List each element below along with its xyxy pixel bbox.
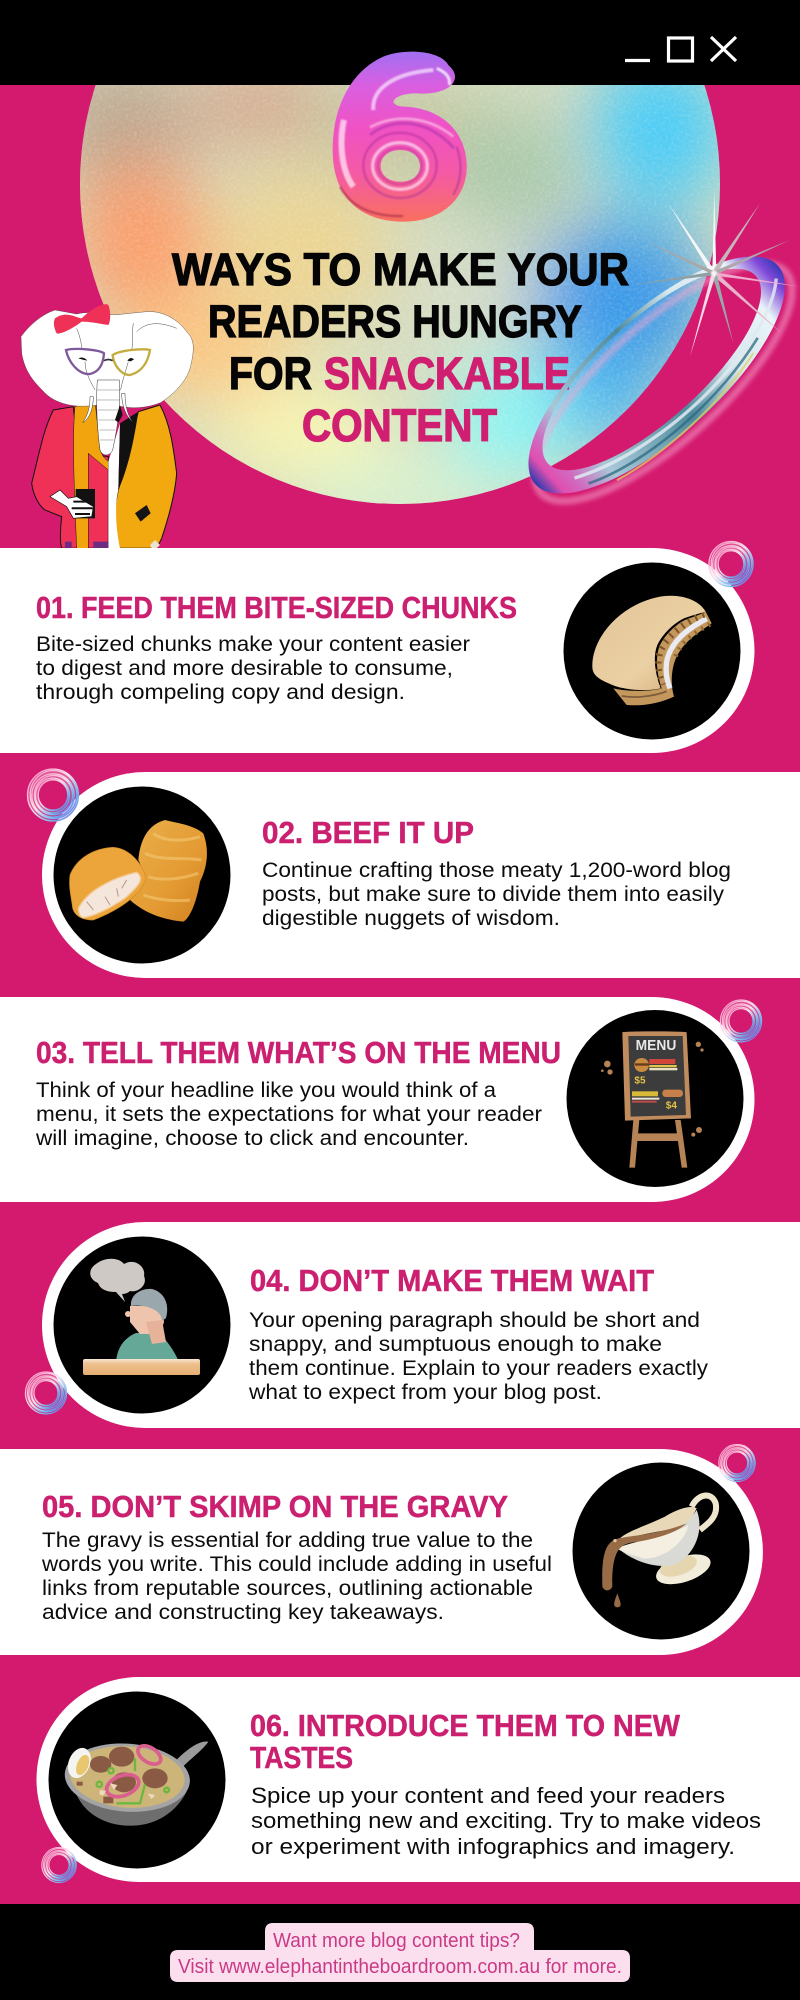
title: SNACKABLE (324, 348, 570, 399)
text: step 02 body: Continue crafting those meaty 1,200-word blog (262, 859, 731, 882)
title: WAYS TO MAKE YOUR (172, 244, 629, 295)
icon: waiting person at desk (54, 1236, 230, 1414)
title: FOR (229, 348, 312, 399)
icon: menu board on easel: $5 (634, 1076, 646, 1087)
heading: step 06 (250, 1708, 681, 1775)
holographic ring with starburst (493, 190, 800, 536)
icon: swirl ring (28, 769, 78, 821)
text: step 05 body (41, 1529, 552, 1624)
text: step 05 body: words you write. This could include adding in useful (41, 1553, 552, 1576)
text: step 06 body: something new and exciting. Try to make videos (251, 1808, 761, 1833)
text: step 04 body: them continue. Explain to your readers exactly (249, 1357, 709, 1380)
text: step 04 body: Your opening paragraph should be short and (249, 1309, 700, 1332)
text: step 03 body: Think of your headline like you would think of a (36, 1079, 496, 1102)
icon: bitten cookie (564, 562, 740, 740)
footer callout: Visit www.elephantintheboardroom.com.au for more. (178, 1956, 622, 1978)
text: step 01 body: to digest and more desirable to consume, (36, 657, 453, 680)
text: step 04 body (248, 1309, 709, 1404)
icon: noodle soup bowl (48, 1692, 226, 1868)
text: step 06 body: Spice up your content and feed your readers (251, 1783, 725, 1808)
heading: step 02: 02. BEEF IT UP (262, 815, 474, 850)
title: READERS HUNGRY (208, 296, 582, 347)
icon: swirl ring (42, 1847, 76, 1883)
icon: menu board on easel: $4 (666, 1101, 677, 1112)
title (172, 244, 629, 451)
top black window bar (0, 0, 800, 85)
text: step 06 body: or experiment with infographics and imagery. (251, 1834, 735, 1859)
text: step 04 body: what to expect from your blog post. (248, 1381, 602, 1404)
text: step 03 body: will imagine, choose to click and encounter. (35, 1127, 469, 1150)
holographic foil circle (80, 85, 720, 504)
icon: swirl ring (719, 1444, 755, 1482)
icon: menu board on easel (566, 1010, 744, 1187)
icon: menu board on easel: MENU (636, 1038, 676, 1054)
heading: step 06: TASTES (250, 1740, 353, 1775)
panel: step 05 (0, 1444, 763, 1655)
text: step 01 body (36, 633, 470, 704)
panel: step 02 (28, 769, 800, 978)
text: step 05 body: advice and constructing key takeaways. (42, 1601, 444, 1624)
heading: step 04: 04. DON’T MAKE THEM WAIT (250, 1263, 654, 1298)
window controls icons (625, 37, 736, 61)
heading: step 01: 01. FEED THEM BITE-SIZED CHUNKS (36, 590, 517, 625)
icon: swirl ring (720, 1000, 762, 1042)
big balloon number 6 (333, 52, 467, 222)
heading: step 05: 05. DON’T SKIMP ON THE GRAVY (42, 1489, 508, 1524)
text: step 02 body (262, 859, 731, 930)
text: step 04 body: snappy, and sumptuous enough to make (249, 1333, 662, 1356)
icon: swirl ring (709, 541, 753, 587)
title: CONTENT (302, 400, 497, 451)
text: step 06 body (251, 1783, 761, 1859)
panel: step 03 (0, 997, 762, 1202)
text: step 05 body: The gravy is essential for adding true value to the (42, 1529, 533, 1552)
text: step 01 body: through compeling copy and design. (36, 681, 405, 704)
panel: step 01 (0, 541, 754, 753)
text: step 03 body (35, 1079, 542, 1150)
text: step 02 body: posts, but make sure to divide them into easily (262, 883, 725, 906)
footer black band (0, 1904, 800, 2000)
text: step 01 body: Bite-sized chunks make your content easier (36, 633, 470, 656)
panel: step 06 (36, 1677, 800, 1883)
heading: step 06: 06. INTRODUCE THEM TO NEW (250, 1708, 681, 1743)
elephant mascot in jacket (21, 304, 193, 548)
text: step 03 body: menu, it sets the expectations for what your reader (36, 1103, 542, 1126)
heading: step 03: 03. TELL THEM WHAT’S ON THE MENU (36, 1035, 561, 1070)
text: step 02 body: digestible nuggets of wisdom. (262, 907, 560, 930)
text: step 05 body: links from reputable sources, outlining actionable (42, 1577, 533, 1600)
icon: chicken nuggets (54, 786, 230, 964)
footer callout: Want more blog content tips? (273, 1930, 520, 1952)
footer callout (170, 1923, 630, 1982)
icon: gravy boat (572, 1462, 750, 1640)
icon: swirl ring (25, 1372, 67, 1414)
panel: step 04 (25, 1222, 800, 1428)
